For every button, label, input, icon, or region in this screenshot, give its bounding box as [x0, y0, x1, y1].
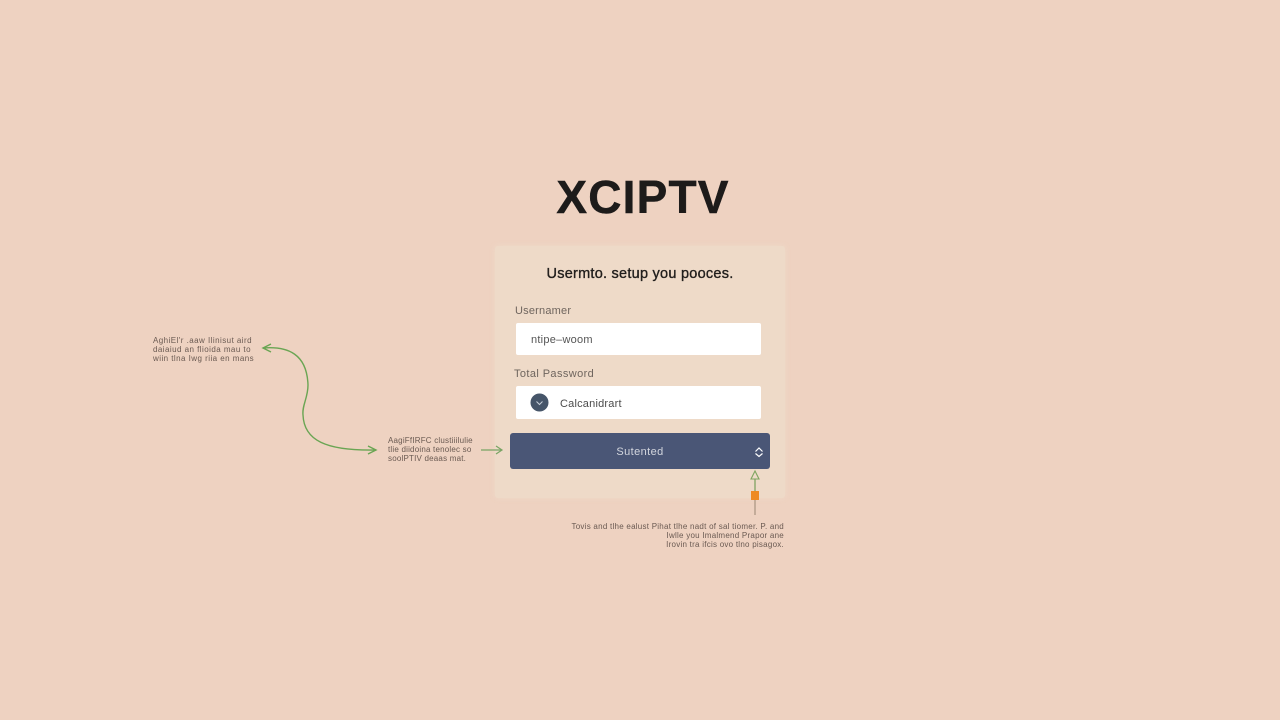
- password label: Total Password: [514, 368, 594, 380]
- callout: bottom note: Tovis and tlhe ealust Pihat tlhe nadt of sal tiomer. P. and: [571, 522, 784, 531]
- callout: middle note: AagiFfIRFC clustiiilulie: [388, 436, 473, 445]
- callout: bottom note: Irovin tra ifcis ovo tlno pisagox.: [666, 540, 784, 549]
- form heading: Usermto. setup you pooces.: [546, 266, 734, 282]
- callout: left note: [153, 336, 254, 363]
- arrow to submit button: [481, 446, 503, 454]
- username value: ntipe–woom: [531, 334, 593, 346]
- callout: left note: daiaiud an flioida mau to: [153, 345, 251, 354]
- icon: chevron badge: [530, 394, 548, 412]
- submit button: [510, 433, 770, 469]
- button label: Sutented: [616, 446, 664, 458]
- curved arrow connecting callouts: [262, 343, 378, 455]
- icon: button glyph: [755, 447, 763, 458]
- callout: middle note: tlie diidoina tenolec so: [388, 445, 472, 454]
- callout: left note: wiin tlna Iwg riia en mans: [153, 354, 254, 363]
- username input: [516, 323, 761, 355]
- password value: Calcanidrart: [560, 398, 622, 410]
- callout: middle note: [388, 436, 473, 463]
- username label: Usernamer: [515, 305, 571, 317]
- callout: bottom note: Iwlle you Imalmend Prapor ane: [666, 531, 784, 540]
- callout: left note: AghiEl'r .aaw Ilinisut aird: [153, 336, 252, 345]
- callout: middle note: soolPTIV deaas mat.: [388, 454, 466, 463]
- title: XCIPTV: [556, 171, 730, 223]
- panel: login form: [495, 246, 785, 498]
- arrow up to button with orange marker: [750, 470, 760, 515]
- callout: bottom note: [571, 522, 784, 549]
- password input: [516, 386, 761, 419]
